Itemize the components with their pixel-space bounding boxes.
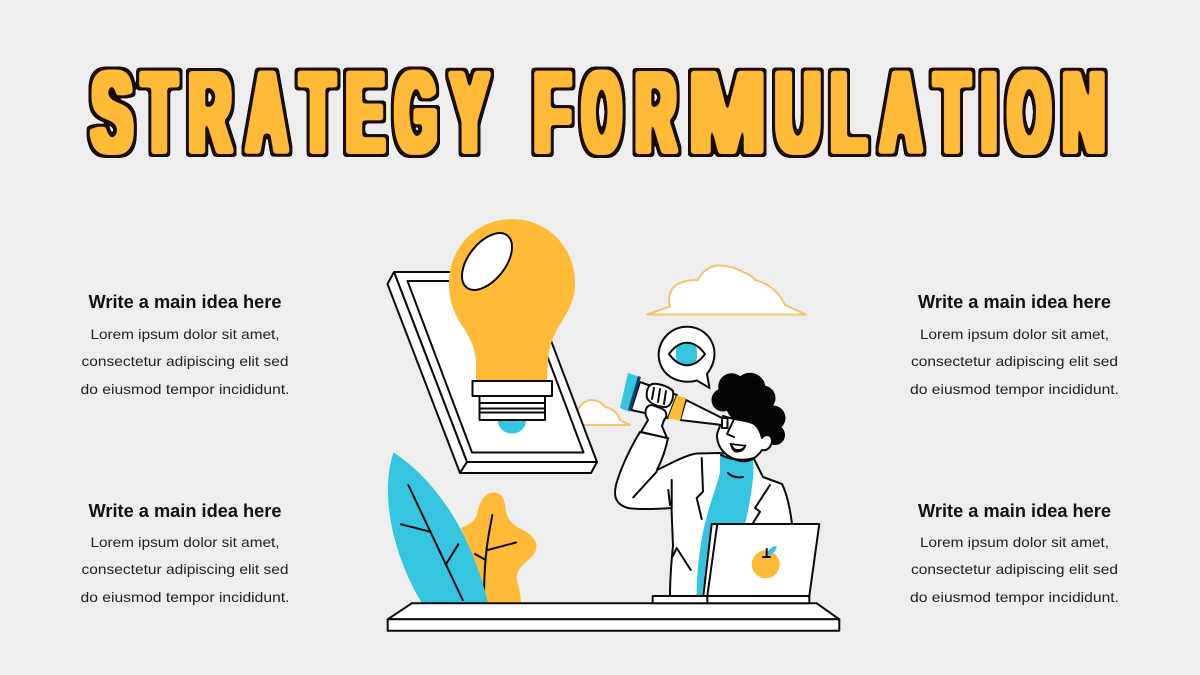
- text block: top right: consectetur adipiscing elit sed: [911, 353, 1118, 369]
- mouth: [730, 443, 746, 452]
- bulb socket: [472, 381, 552, 420]
- text block: bottom right: Lorem ipsum dolor sit amet,: [920, 534, 1109, 550]
- title: A: [247, 49, 287, 177]
- title: T: [301, 49, 334, 177]
- icon: speech bubble with eye: [659, 327, 714, 388]
- collar: [721, 455, 753, 460]
- text block: bottom right: do eiusmod tempor incididunt.: [910, 589, 1119, 605]
- title: E: [346, 49, 384, 177]
- icon: small cloud: [565, 400, 630, 425]
- coat folds: [633, 458, 770, 570]
- bulb highlight: [452, 224, 522, 299]
- text block: bottom right: [910, 501, 1119, 605]
- illustration: desk: [388, 603, 839, 631]
- text block: top right: Write a main idea here: [918, 292, 1111, 312]
- title: F: [534, 49, 570, 177]
- bulb base glow: [498, 420, 526, 434]
- text block: bottom right: consectetur adipiscing elit sed: [911, 561, 1118, 577]
- icon: orange logo: [752, 546, 780, 578]
- title: S: [92, 49, 132, 177]
- text block: top left: do eiusmod tempor incididunt.: [80, 381, 290, 397]
- text block: top left: Write a main idea here: [88, 292, 282, 312]
- title: A: [881, 49, 921, 177]
- hair: [712, 373, 786, 445]
- icon: orange plant: [461, 492, 537, 604]
- text block: top right: do eiusmod tempor incididunt.: [910, 381, 1119, 397]
- title: O: [583, 49, 621, 177]
- text block: top right: [910, 292, 1119, 397]
- icon: large cloud: [647, 265, 806, 314]
- text block: bottom left: Lorem ipsum dolor sit amet,: [90, 534, 280, 550]
- icon: light bulb: [449, 219, 575, 434]
- icon: blue leaf: [388, 452, 488, 604]
- bulb glass: [449, 219, 575, 381]
- title: U: [775, 49, 821, 177]
- title: M: [689, 49, 766, 177]
- telescope: [620, 373, 728, 428]
- title: R: [189, 49, 231, 177]
- text block: bottom left: do eiusmod tempor incididunt.: [80, 589, 290, 605]
- text block: top left: consectetur adipiscing elit sed: [82, 353, 288, 369]
- nose: [727, 417, 735, 437]
- coat: [615, 432, 792, 596]
- title: Y: [451, 49, 488, 177]
- text block: top right: Lorem ipsum dolor sit amet,: [920, 326, 1109, 342]
- hand and fist: [641, 384, 673, 438]
- title: R: [636, 49, 676, 177]
- title: T: [935, 49, 969, 177]
- text block: top left: [80, 292, 290, 397]
- text block: bottom left: consectetur adipiscing elit sed: [82, 561, 288, 577]
- text block: bottom left: [80, 501, 290, 605]
- title: I: [982, 49, 996, 177]
- face: [717, 416, 772, 461]
- illustration: tablet frame: [388, 272, 597, 473]
- text block: bottom left: Write a main idea here: [88, 501, 282, 521]
- title: O: [1008, 49, 1050, 177]
- scarf: [696, 453, 754, 596]
- title: L: [831, 49, 866, 177]
- title: T: [142, 49, 176, 177]
- illustration: person with telescope: [615, 373, 792, 596]
- title: N: [1063, 49, 1105, 177]
- text block: top left: Lorem ipsum dolor sit amet,: [90, 326, 280, 342]
- illustration: laptop: [653, 524, 819, 603]
- title: G: [396, 49, 436, 177]
- text block: bottom right: Write a main idea here: [918, 501, 1111, 521]
